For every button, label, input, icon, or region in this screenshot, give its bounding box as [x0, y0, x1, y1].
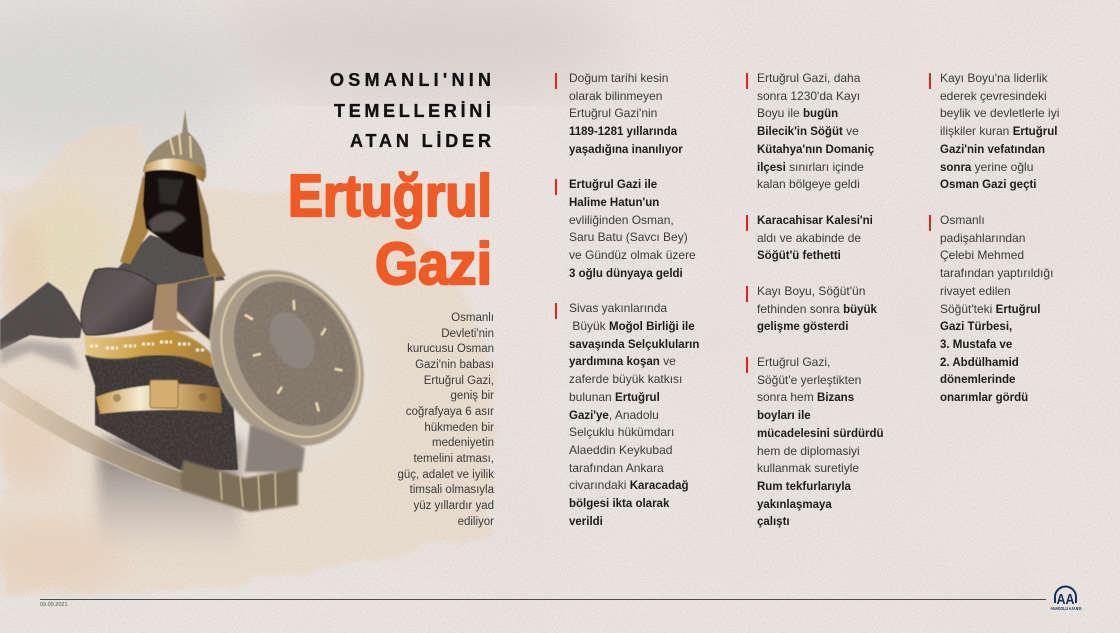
intro paragraph: Devleti'nin	[441, 328, 494, 340]
fact bar 5	[746, 215, 748, 231]
fact text 7: Söğüt'e yerleştikten	[757, 373, 861, 387]
fact text 1: yaşadığına inanılıyor	[569, 144, 683, 156]
fact text 5	[757, 215, 873, 262]
fact text 3: Gazi'ye, Anadolu	[569, 408, 659, 422]
fact text 7: Rum tekfurlarıyla	[757, 481, 851, 493]
intro paragraph: coğrafyaya 6 asır	[406, 406, 494, 418]
fact text 3: Sivas yakınlarında	[569, 301, 667, 315]
fact text 3: bölgesi ikta olarak	[569, 498, 669, 510]
statue gold belt	[96, 380, 222, 414]
fact text 7: mücadelesini sürdürdü	[757, 428, 884, 440]
statue sword blade	[0, 378, 185, 490]
column 1 facts	[555, 71, 699, 528]
intro paragraph: Osmanlı	[451, 312, 494, 324]
fact text 9	[940, 213, 1053, 404]
logo: Anadolu Ajansı	[1050, 586, 1082, 611]
fact text 2: 3 oğlu dünyaya geldi	[569, 268, 683, 280]
statue neck mail	[118, 235, 225, 298]
fact bar 4	[746, 73, 748, 89]
intro paragraph: Ertuğrul Gazi,	[424, 375, 494, 387]
fact text 1: olarak bilinmeyen	[569, 89, 662, 103]
fact text 9: 2. Abdülhamid	[940, 357, 1019, 369]
fact bar 3	[555, 303, 557, 319]
fact text 8: ilişkiler kuran Ertuğrul	[940, 124, 1057, 138]
intro paragraph: kurucusu Osman	[407, 343, 494, 355]
fact text 7: çalıştı	[757, 516, 790, 528]
fact text 4: kalan bölgeye geldi	[757, 177, 860, 191]
intro paragraph: timsali olmasıyla	[410, 484, 494, 496]
fact text 9: Çelebi Mehmed	[940, 248, 1024, 262]
fact text 7: Ertuğrul Gazi,	[757, 355, 830, 369]
fact bar 9	[929, 215, 931, 231]
fact text 7: yakınlaşmaya	[757, 499, 832, 511]
intro paragraph: güç, adalet ve iyilik	[397, 469, 494, 481]
intro paragraph: medeniyetin	[432, 437, 494, 449]
statue soft halo	[208, 273, 372, 457]
statue left arm	[0, 282, 82, 350]
fact text 4: Boyu ile bugün	[757, 106, 838, 120]
title: osmanlı'nın temellerini atan lider: TEMELLERİNİ	[334, 101, 491, 121]
fact text 9: dönemlerinde	[940, 374, 1015, 386]
fact text 8: Osman Gazi geçti	[940, 179, 1037, 191]
fact text 4: Ertuğrul Gazi, daha	[757, 71, 860, 85]
statue shield	[180, 243, 394, 473]
title: osmanlı'nın temellerini atan lider	[288, 70, 492, 297]
statue shoulder plates	[81, 268, 156, 335]
fact text 3: yardımına koşan ve	[569, 354, 676, 368]
fact bar 2	[555, 179, 557, 195]
statue sword hilt and hand	[180, 460, 298, 512]
fact text 8	[940, 71, 1059, 191]
fact text 7: hem de diplomasiyi	[757, 444, 860, 458]
fact text 2	[569, 179, 696, 280]
statue mail torso	[85, 355, 238, 470]
fact text 9: Söğüt'teki Ertuğrul	[940, 302, 1040, 316]
fact text 6: gelişme gösterdi	[757, 321, 848, 333]
intro paragraph: ediliyor	[458, 516, 494, 528]
fact bar 6	[746, 286, 748, 302]
fact text 2: Ertuğrul Gazi ile	[569, 179, 657, 191]
statue gold chain band	[84, 330, 215, 368]
fact text 7: boyları ile	[757, 410, 811, 422]
intro paragraph: temelini atması,	[413, 453, 494, 465]
fact text 8: sonra yerine oğlu	[940, 160, 1033, 174]
fact text 9: Osmanlı	[940, 213, 985, 227]
fact text 6: fethinden sonra büyük	[757, 302, 877, 316]
fact text 8: beylik ve devletlerle iyi	[940, 106, 1059, 120]
intro paragraph	[397, 312, 494, 528]
fact text 9: padişahlarından	[940, 231, 1025, 245]
fact text 3: savaşında Selçukluların	[569, 339, 699, 351]
title: osmanlı'nın temellerini atan lider: OSMANLI'NIN	[330, 70, 491, 90]
fact text 9: rivayet edilen	[940, 284, 1011, 298]
statue helmet	[120, 110, 226, 278]
warrior statue illustration	[0, 110, 370, 542]
name heading: Ertuğrul Gazi: Ertuğrul	[288, 163, 492, 229]
fact text 4: sonra 1230'da Kayı	[757, 89, 860, 103]
fact text 3: bulunan Ertuğrul	[569, 390, 660, 404]
fact text 4: Kütahya'nın Domaniç	[757, 144, 874, 156]
footer rule	[40, 599, 1046, 600]
fact text 2: Halime Hatun'un	[569, 197, 659, 209]
column 3 facts	[929, 71, 1059, 404]
fact bar 1	[555, 73, 557, 89]
fact text 3: zaferde büyük katkısı	[569, 372, 682, 386]
fact text 9: onarımlar gördü	[940, 392, 1028, 404]
fact text 3	[569, 301, 699, 528]
fact text 3: verildi	[569, 516, 603, 528]
title: osmanlı'nın temellerini atan lider: ATAN LİDER	[350, 131, 491, 151]
intro paragraph: hükmeden bir	[424, 422, 494, 434]
fact bar 8	[929, 73, 931, 89]
fact text 3: Alaeddin Keykubad	[569, 443, 672, 457]
fact text 2: evliliğinden Osman,	[569, 213, 674, 227]
fact text 7: sonra hem Bizans	[757, 390, 854, 404]
statue lower skirt	[98, 440, 240, 562]
column 2 facts	[746, 71, 884, 528]
fact text 1: 1189-1281 yıllarında	[569, 126, 677, 138]
fact text 1	[569, 71, 683, 156]
fact text 4: ilçesi sınırları içinde	[757, 160, 864, 174]
fact text 5: Karacahisar Kalesi'ni	[757, 215, 873, 227]
fact text 3: civarındaki Karacadağ	[569, 478, 689, 492]
fact text 3: Büyük Moğol Birliği ile	[572, 319, 695, 333]
intro paragraph: geniş bir	[451, 390, 494, 402]
fact text 8: Kayı Boyu'na liderlik	[940, 71, 1048, 85]
fact text 7	[757, 355, 884, 528]
logo: Anadolu Ajansı: AA	[1056, 591, 1075, 608]
statue right forearm	[245, 425, 305, 472]
fact text 3: Selçuklu hükümdarı	[569, 425, 674, 439]
name heading: Ertuğrul Gazi	[288, 163, 492, 297]
fact text 6: Kayı Boyu, Söğüt'ün	[757, 284, 865, 298]
footer date: 09.09.2021	[40, 602, 68, 608]
fact bar 7	[746, 357, 748, 373]
intro paragraph: Gazi'nin babası	[415, 359, 494, 371]
name heading: Ertuğrul Gazi: Gazi	[375, 231, 492, 297]
fact text 7: kullanmak suretiyle	[757, 461, 859, 475]
fact text 9: Gazi Türbesi,	[940, 321, 1012, 333]
fact text 8: Gazi'nin vefatından	[940, 144, 1045, 156]
fact text 9: 3. Mustafa ve	[940, 339, 1012, 351]
fact text 9: tarafından yaptırıldığı	[940, 266, 1053, 280]
fact text 8: ederek çevresindeki	[940, 89, 1047, 103]
fact text 6	[757, 284, 877, 333]
fact text 4: Bilecik'in Söğüt ve	[757, 124, 859, 138]
fact text 2: ve Gündüz olmak üzere	[569, 248, 696, 262]
logo: Anadolu Ajansı: ANADOLU AJANSI	[1050, 606, 1082, 611]
fact text 4	[757, 71, 874, 191]
statue face	[143, 170, 204, 258]
fact text 5: Söğüt'ü fethetti	[757, 250, 841, 262]
intro paragraph: yüz yıllardır yad	[413, 500, 494, 512]
fact text 1: Ertuğrul Gazi'nin	[569, 106, 657, 120]
fact text 3: tarafından Ankara	[569, 461, 664, 475]
fact text 1: Doğum tarihi kesin	[569, 71, 668, 85]
fact text 2: Saru Batu (Savcı Bey)	[569, 230, 688, 244]
fact text 5: aldı ve akabinde de	[757, 231, 861, 245]
